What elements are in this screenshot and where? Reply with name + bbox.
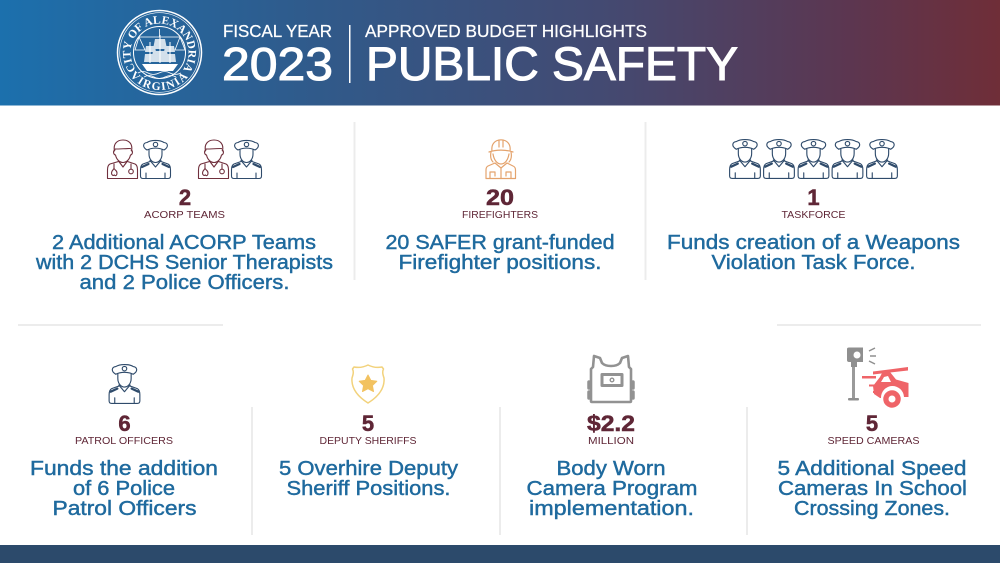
number: $2.2 (587, 411, 635, 436)
number: 2 (179, 185, 191, 210)
panel: body worn cameras (526, 356, 698, 520)
panel: speed cameras (778, 348, 967, 520)
header band (0, 0, 1000, 106)
description: Funds creation of a Weapons (667, 231, 960, 254)
description: with 2 DCHS Senior Therapists (35, 251, 333, 274)
description: of 6 Police (73, 477, 175, 500)
text: public safety: PUBLIC SAFETY (366, 37, 738, 90)
number: 6 (118, 411, 131, 436)
description: 2 Additional ACORP Teams (52, 231, 316, 254)
description: Sheriff Positions. (286, 477, 450, 500)
icon: officer (109, 365, 140, 403)
dividers (18, 122, 981, 535)
label: FIREFIGHTERS (462, 209, 538, 221)
description: Camera Program (526, 477, 698, 500)
description: Patrol Officers (52, 497, 196, 520)
icon: speed camera and car (847, 348, 908, 408)
panel: firefighters (386, 140, 614, 274)
label: SPEED CAMERAS (828, 435, 920, 447)
text: fiscal year: FISCAL YEAR (223, 21, 332, 41)
description: 5 Additional Speed (778, 457, 966, 480)
panel: deputy sheriffs (279, 365, 459, 500)
number: 20 (486, 185, 514, 210)
panel: patrol officers (30, 365, 218, 520)
description: Firefighter positions. (398, 251, 602, 274)
icon: city seal (116, 10, 202, 96)
icon: firefighter (486, 140, 516, 178)
description: Crossing Zones. (794, 497, 950, 520)
number: 5 (362, 411, 374, 436)
description: 20 SAFER grant-funded (386, 231, 614, 254)
divider (349, 25, 350, 83)
panel: ACORP teams (35, 140, 333, 294)
description: Violation Task Force. (712, 251, 916, 274)
label: ACORP TEAMS (144, 209, 225, 221)
text: approved budget highlights: APPROVED BUDGET HIGHLIGHTS (365, 21, 647, 41)
label: DEPUTY SHERIFFS (320, 435, 416, 447)
description: Funds the addition (30, 457, 218, 480)
number: 1 (807, 185, 820, 210)
label: TASKFORCE (782, 209, 846, 221)
panel: taskforce (667, 140, 960, 274)
description: 5 Overhire Deputy (279, 457, 459, 480)
icon: therapists and officers (108, 140, 262, 178)
icon: vest with camera (589, 356, 633, 402)
description: Body Worn (556, 457, 666, 480)
footer band (0, 545, 1000, 563)
number: 5 (866, 411, 878, 436)
label: PATROL OFFICERS (75, 435, 173, 447)
description: and 2 Police Officers. (80, 271, 290, 294)
icon: badge (352, 365, 384, 403)
icon: city seal: VIRGINIA (132, 70, 188, 90)
icon: city seal: CITY OF ALEXANDRIA (122, 16, 196, 72)
description: Cameras In School (778, 477, 967, 500)
description: implementation. (529, 497, 694, 520)
label: MILLION (588, 435, 634, 447)
icon: five officers (730, 140, 897, 178)
text: 2023: 2023 (222, 38, 333, 90)
